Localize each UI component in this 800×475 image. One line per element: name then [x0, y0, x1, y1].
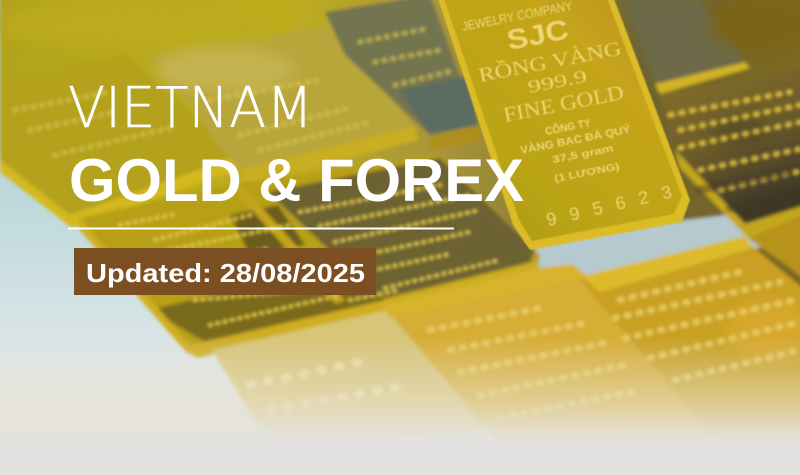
bar inscription: RỒNG VÀNG: [476, 36, 623, 87]
bar inscription: 999.9: [526, 66, 589, 97]
bar inscription: [461, 0, 674, 230]
title line: GOLD & FOREX: GOLD & FOREX: [69, 147, 524, 214]
bottom fade overlay: [0, 335, 800, 445]
updated date badge: [74, 248, 376, 295]
updated date badge: Updated: 28/08/2025: [86, 258, 365, 288]
title: [68, 76, 524, 214]
bar inscription: 995623: [544, 182, 674, 230]
bar inscription: FINE GOLD: [501, 80, 626, 127]
bar inscription: CÔNG TY: [544, 116, 592, 138]
blurred highlights at the top: [0, 0, 800, 360]
bar inscription: (1 LƯỢNG): [553, 162, 620, 185]
bar inscription: SJC: [504, 14, 571, 56]
title line: VIETNAM: VIETNAM: [68, 76, 313, 141]
bar inscription: VÀNG BẠC ĐÁ QUÝ: [519, 123, 632, 157]
gold bar: SJC 999.9: [437, 0, 690, 250]
bar inscription: 37,5 gram: [551, 143, 615, 166]
